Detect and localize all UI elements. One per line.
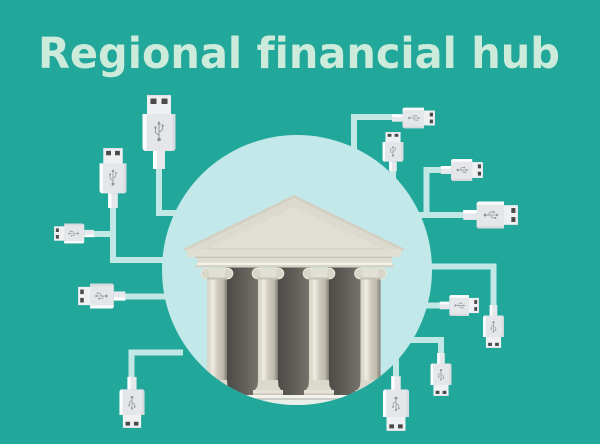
columns — [201, 268, 386, 396]
usb plug: top right vertical — [383, 132, 403, 171]
usb plug: left upper — [100, 148, 126, 208]
usb plug: right lower vertical — [483, 305, 504, 348]
usb plug: top left large — [142, 95, 176, 169]
steps — [246, 395, 348, 405]
entablature — [195, 257, 394, 268]
usb plug: right large — [463, 201, 518, 229]
usb plug: far left small — [54, 224, 94, 243]
title: Regional financial hub — [38, 29, 560, 79]
usb plug: right lower horizontal — [440, 295, 479, 316]
bank building — [183, 195, 410, 406]
connection cables — [92, 117, 494, 380]
usb plug: left middle — [78, 283, 125, 309]
usb plug: bottom centre right — [383, 376, 409, 431]
usb plug: right upper — [441, 159, 483, 181]
infographic canvas — [42, 36, 558, 431]
central circle — [162, 135, 432, 405]
usb plug: top right upper — [392, 108, 435, 128]
pediment roof — [183, 195, 405, 258]
usb plug: bottom left — [119, 377, 145, 428]
building interior wall — [226, 266, 361, 396]
usb plug: bottom right — [431, 353, 451, 396]
